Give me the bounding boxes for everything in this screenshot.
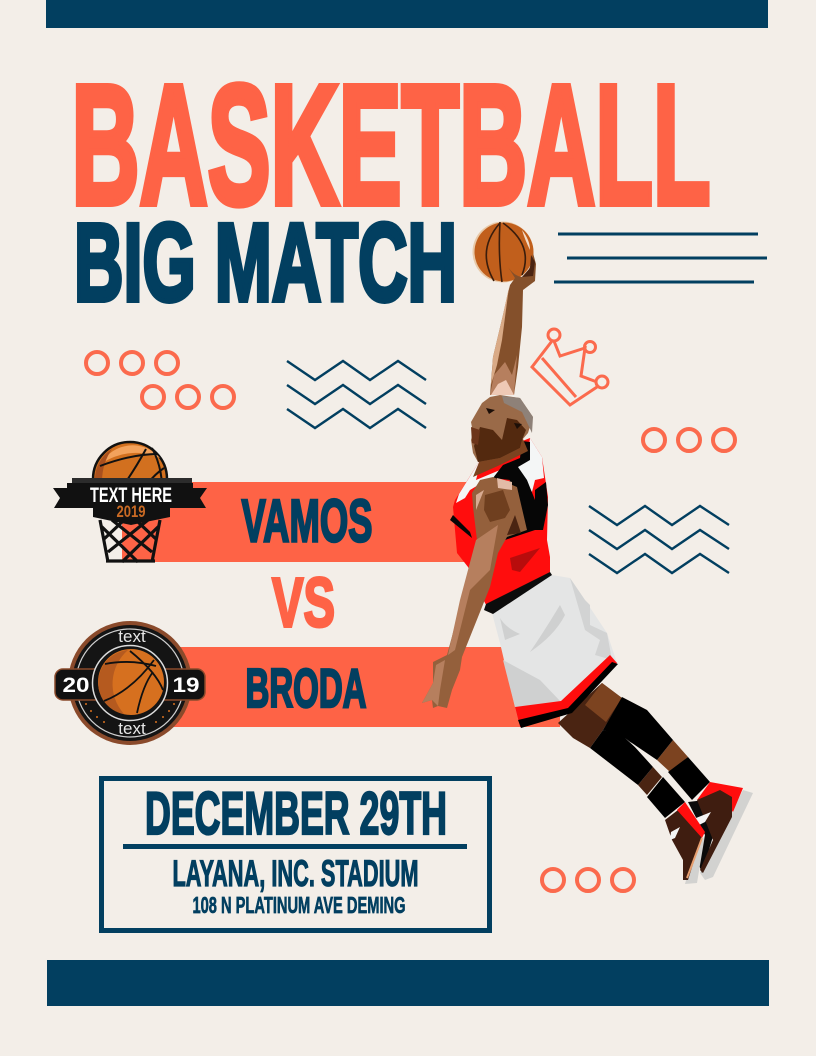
shorts (492, 575, 618, 728)
circles: lower right (542, 869, 634, 891)
front shoe (665, 802, 705, 884)
logo: vamos basket badge: TEXT HERE (90, 484, 172, 507)
subtitle: big match: BIG MATCH (74, 202, 457, 324)
decorative speed lines (554, 234, 767, 282)
team bar: vamos (122, 482, 467, 562)
circles: right (643, 429, 735, 451)
versus label: VS (272, 564, 335, 642)
lowered arm (422, 477, 527, 708)
stadium: LAYANA, INC. STADIUM (172, 853, 418, 894)
raised arm and hand (490, 253, 536, 395)
top band (46, 0, 768, 28)
team bar: broda (130, 647, 560, 727)
logo: broda round badge (55, 621, 205, 745)
logo: vamos basket badge: 2019 (116, 502, 146, 521)
date and venue box (102, 778, 490, 930)
basketball (472, 222, 534, 282)
date: DECEMBER 29TH (145, 780, 447, 847)
logo: vamos basket badge (53, 442, 207, 562)
circles: upper left (86, 352, 234, 408)
head (471, 395, 533, 477)
illustration: dunking player (422, 222, 753, 884)
zigzag lines: left (287, 361, 426, 428)
team name: broda: BRODA (246, 657, 366, 719)
logo: broda round badge: text (118, 719, 146, 738)
logo: broda round badge: 20 (62, 674, 90, 697)
legs (558, 683, 710, 818)
logo: broda round badge: 19 (172, 674, 200, 697)
jersey (450, 438, 552, 614)
address: 108 N PLATINUM AVE DEMING (192, 892, 406, 918)
logo: broda round badge: text (118, 627, 146, 646)
bottom band (47, 960, 769, 1006)
zigzag lines: right (589, 506, 729, 573)
team name: vamos: VAMOS (242, 488, 372, 555)
icon: crown (532, 329, 608, 405)
back shoe (688, 782, 753, 880)
